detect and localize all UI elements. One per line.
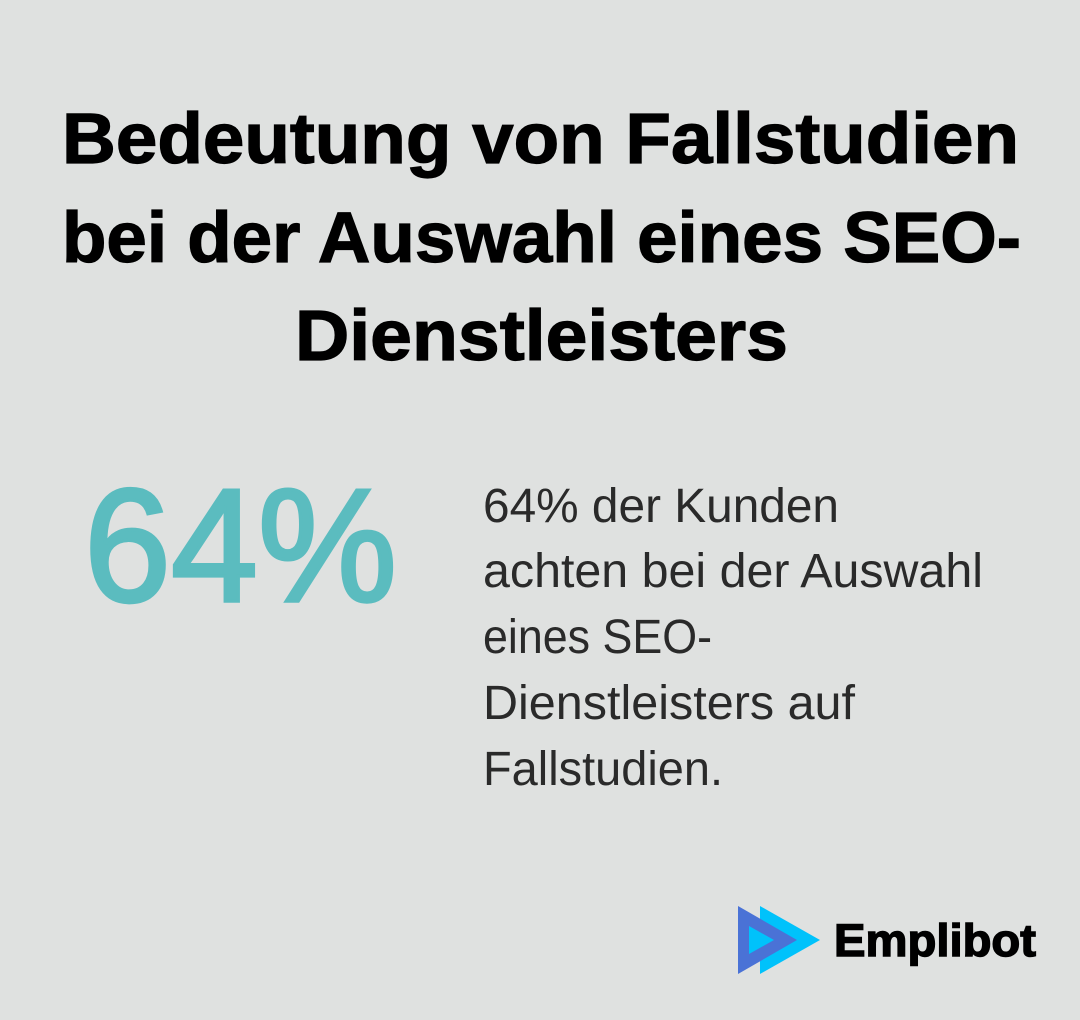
title — [62, 100, 1021, 376]
description text: Dienstleisters auf — [483, 677, 856, 730]
big statistic: 64%: 64% — [84, 456, 397, 636]
title: Bedeutung von Fallstudien — [62, 100, 1019, 179]
description text: 64% der Kunden — [483, 480, 839, 533]
logo wordmark: Emplibot — [834, 915, 1036, 966]
description text: achten bei der Auswahl — [483, 545, 983, 598]
description text — [483, 480, 983, 796]
icon: play triangles — [738, 906, 820, 974]
title: Dienstleisters — [295, 297, 788, 376]
title: bei der Auswahl eines SEO- — [62, 199, 1021, 278]
logo: Emplibot — [738, 906, 1036, 974]
description text: Fallstudien. — [483, 743, 723, 796]
description text: eines SEO- — [483, 611, 712, 664]
